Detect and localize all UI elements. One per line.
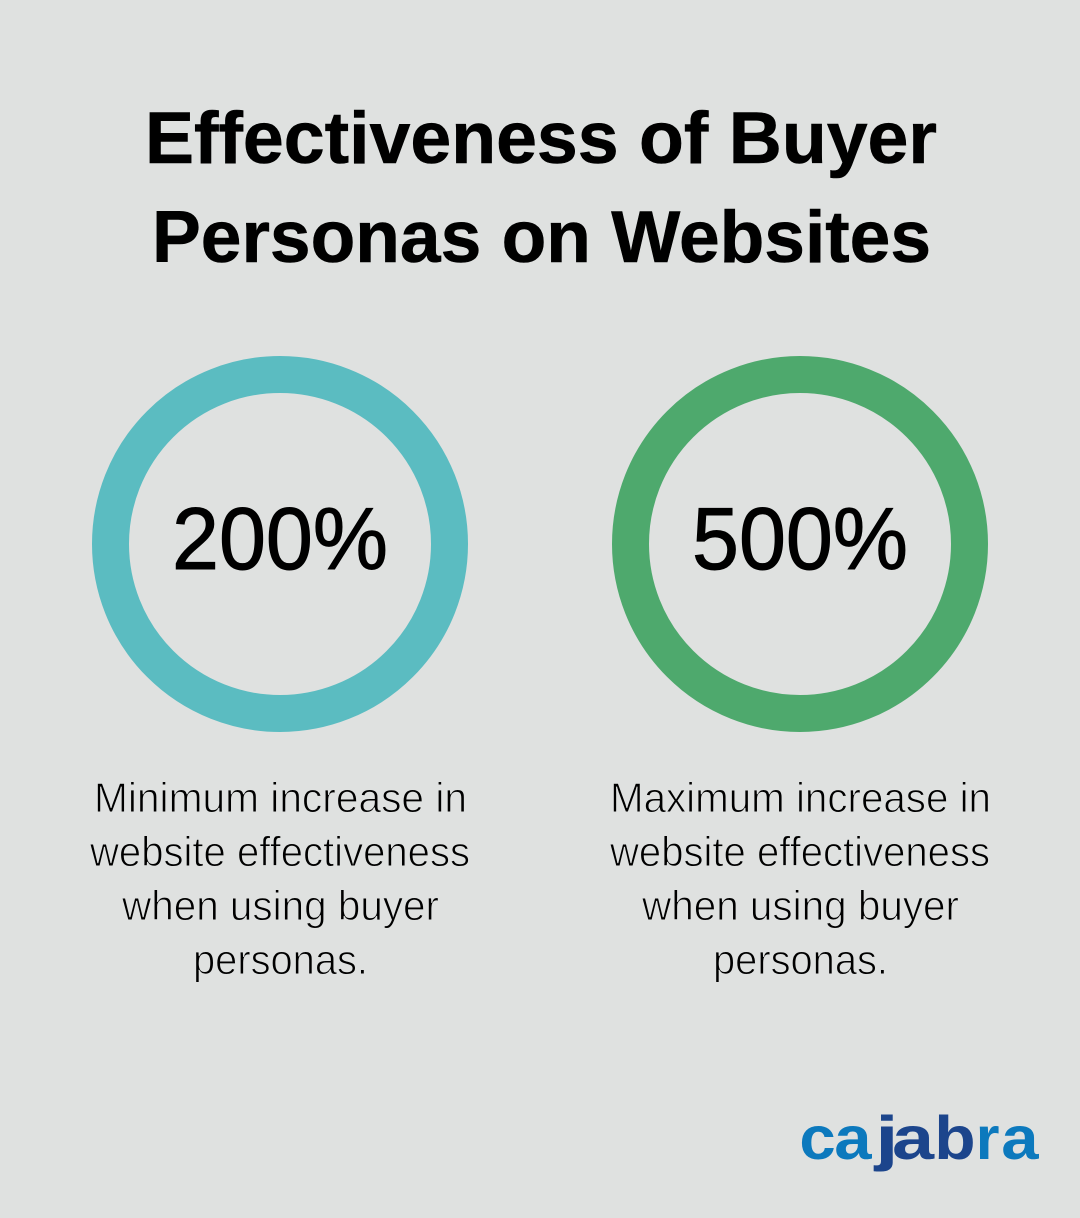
logo: cajabra: j bbox=[873, 1104, 899, 1172]
panel: minimum increase bbox=[89, 374, 470, 983]
logo: cajabra: a bbox=[892, 1104, 935, 1172]
description: maximum increase bbox=[609, 774, 991, 983]
description: maximum increase: website effectiveness bbox=[609, 828, 990, 875]
stat: 500%: 500% bbox=[692, 489, 908, 588]
logo: cajabra: c bbox=[799, 1105, 836, 1173]
logo: cajabra: a bbox=[1001, 1104, 1040, 1172]
description: minimum increase bbox=[89, 774, 470, 983]
logo: cajabra: b bbox=[934, 1104, 976, 1172]
description: maximum increase: when using buyer bbox=[641, 882, 959, 929]
title bbox=[145, 98, 937, 278]
logo: cajabra bbox=[799, 1104, 1040, 1173]
description: minimum increase: Minimum increase in bbox=[94, 774, 467, 821]
title: Personas on Websites bbox=[152, 197, 931, 278]
description: minimum increase: personas. bbox=[193, 936, 368, 983]
logo: cajabra: a bbox=[834, 1104, 873, 1172]
panel: maximum increase bbox=[609, 374, 991, 983]
logo: cajabra: r bbox=[976, 1104, 999, 1172]
description: maximum increase: Maximum increase in bbox=[610, 774, 991, 821]
stat: 200%: 200% bbox=[172, 489, 388, 588]
ring: 200% bbox=[110, 374, 450, 714]
description: minimum increase: website effectiveness bbox=[89, 828, 470, 875]
description: maximum increase: personas. bbox=[713, 936, 888, 983]
ring: 500% bbox=[630, 374, 970, 714]
description: minimum increase: when using buyer bbox=[121, 882, 439, 929]
title: Effectiveness of Buyer bbox=[145, 98, 937, 179]
